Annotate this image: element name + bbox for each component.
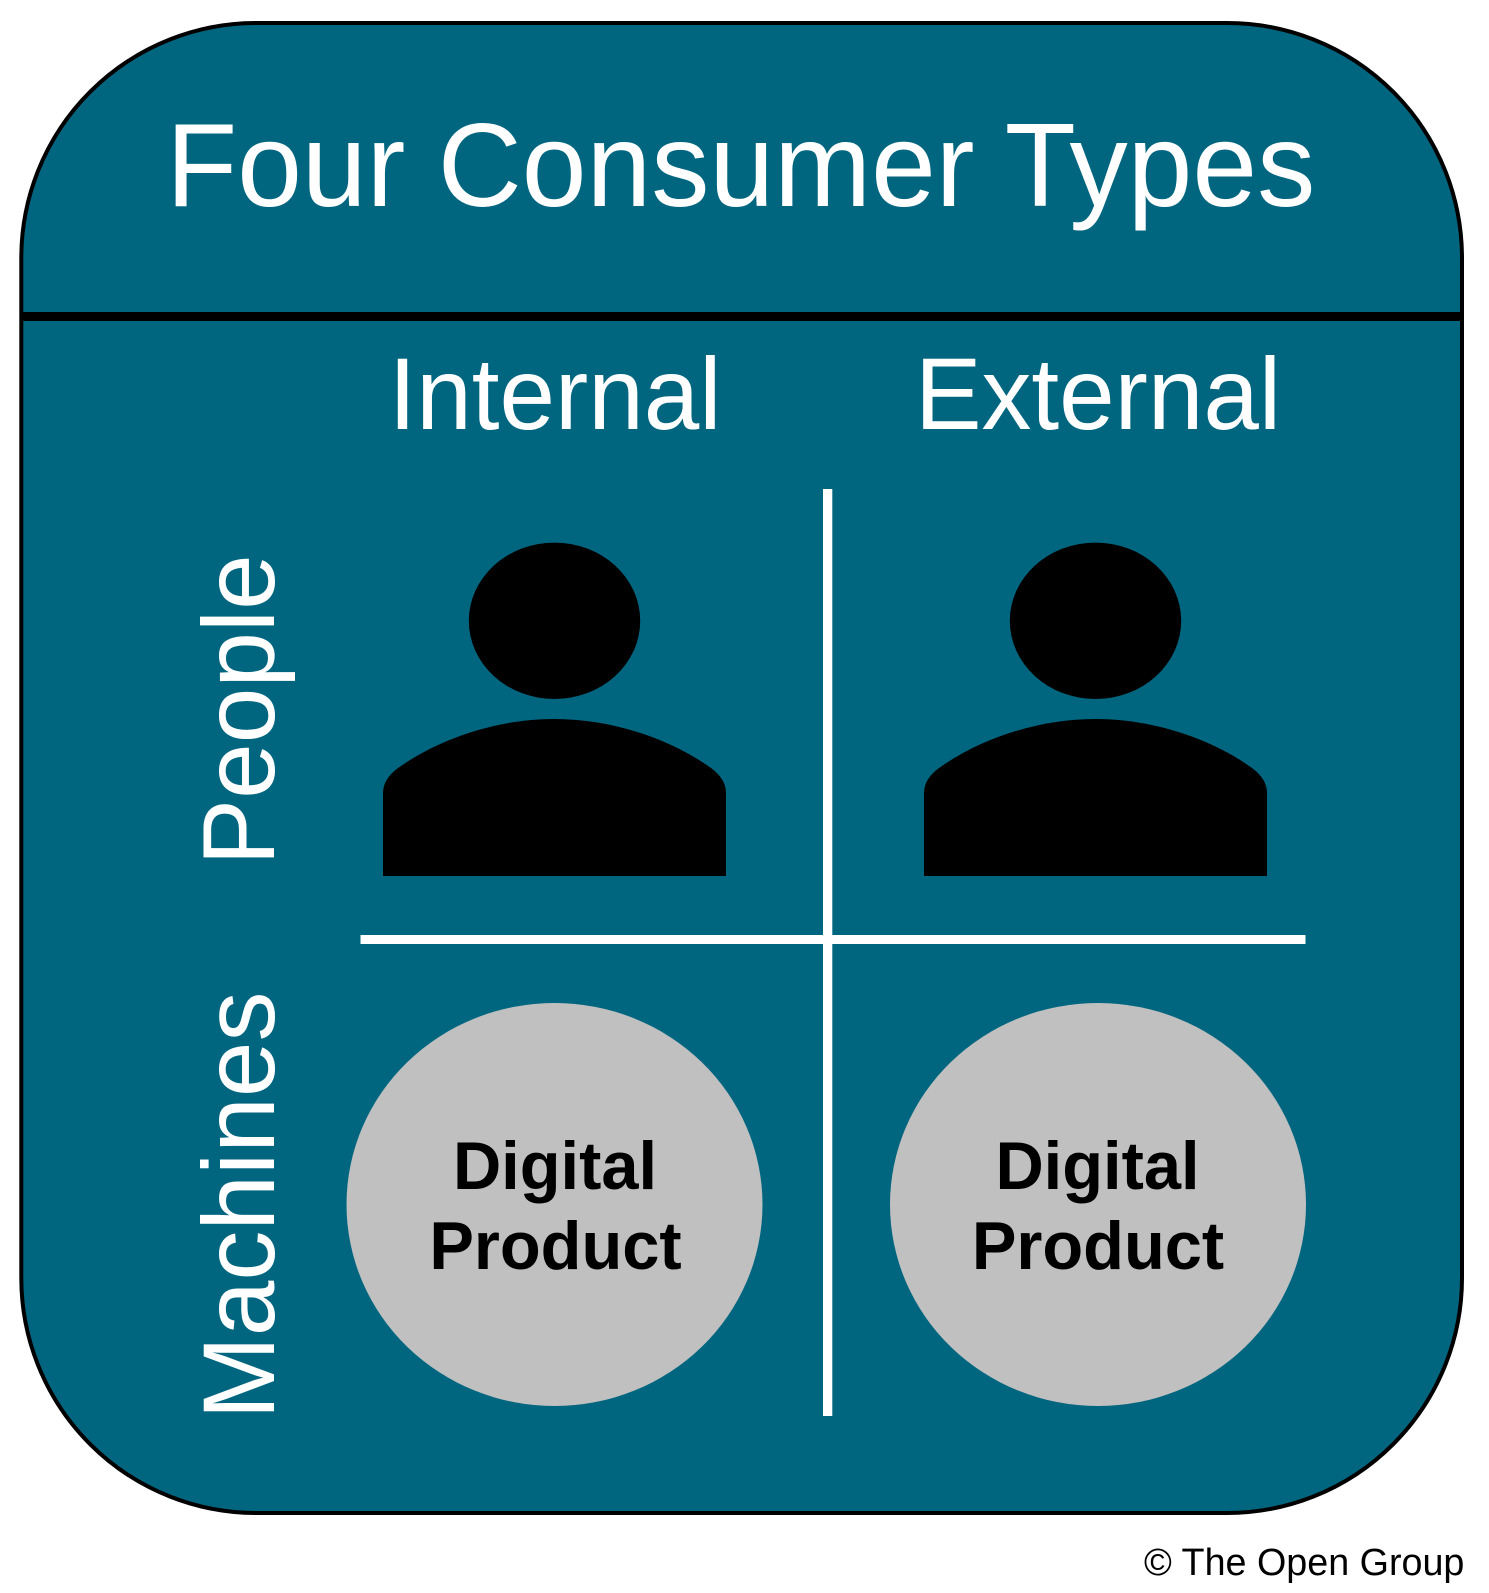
label: internal digital product: Product: [429, 1208, 682, 1284]
label: external digital product: [972, 1128, 1224, 1284]
label: internal digital product: Digital: [453, 1128, 657, 1204]
icon: internal person: [383, 543, 726, 876]
grid line: vertical: [823, 489, 832, 1416]
circle: internal machine: [346, 1003, 762, 1406]
label: external digital product: Product: [972, 1208, 1224, 1284]
internal digital product: [346, 1003, 762, 1406]
icon: external person: [924, 543, 1267, 876]
title: Four Consumer Types: [166, 99, 1315, 231]
external digital product: [890, 1003, 1306, 1406]
circle: external machine: [890, 1003, 1306, 1406]
label: external digital product: Digital: [995, 1128, 1200, 1204]
column heading: External: External: [915, 338, 1281, 451]
row heading: Machines: Machines: [183, 992, 296, 1420]
divider: below title: [21, 312, 1462, 321]
label: internal digital product: [429, 1128, 682, 1284]
copyright: © The Open Group: [1144, 1541, 1464, 1583]
row heading: People: People: [183, 554, 296, 866]
column heading: Internal: Internal: [389, 338, 721, 451]
grid line: horizontal: [360, 935, 1306, 944]
